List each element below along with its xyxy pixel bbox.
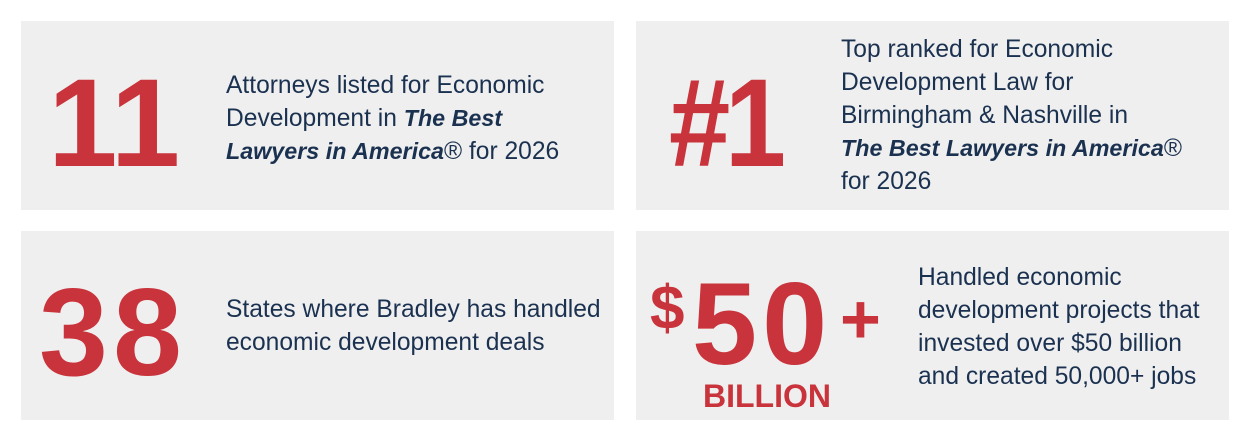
panel: billion: [636, 231, 1229, 420]
panel: top ranked: [636, 21, 1229, 210]
text: states: economic development deals: [226, 329, 545, 356]
text: attorneys: [226, 72, 559, 165]
text: attorneys: Attorneys listed for Economic: [226, 72, 544, 99]
number 11: 11: [48, 54, 180, 193]
text: top ranked: Development Law for: [841, 69, 1073, 96]
number 38: 38: [39, 264, 187, 402]
text: billion: [918, 264, 1200, 390]
number $50+: [650, 258, 881, 414]
number $50+: +: [840, 280, 881, 358]
panel: attorneys: [21, 21, 614, 210]
number $50+: $: [650, 274, 684, 343]
text: states: States where Bradley has handled: [226, 296, 601, 323]
number #1: #1: [669, 54, 781, 193]
panel: states: [21, 231, 614, 420]
text: billion: invested over $50 billion: [918, 330, 1182, 357]
text: top ranked: The Best Lawyers in America®: [841, 135, 1182, 162]
text: attorneys: Lawyers in America® for 2026: [226, 138, 559, 165]
text: billion: Handled economic: [918, 264, 1122, 291]
text: billion: development projects that: [918, 297, 1200, 324]
text: top ranked: [841, 36, 1182, 195]
text: top ranked: for 2026: [841, 168, 931, 195]
number $50+: BILLION: [703, 378, 831, 414]
text: top ranked: Birmingham & Nashville in: [841, 102, 1128, 129]
text: billion: and created 50,000+ jobs: [918, 363, 1196, 390]
number $50+: 50: [692, 258, 832, 389]
text: attorneys: Development in The Best: [226, 105, 502, 132]
text: top ranked: Top ranked for Economic: [841, 36, 1113, 63]
text: states: [226, 296, 601, 356]
